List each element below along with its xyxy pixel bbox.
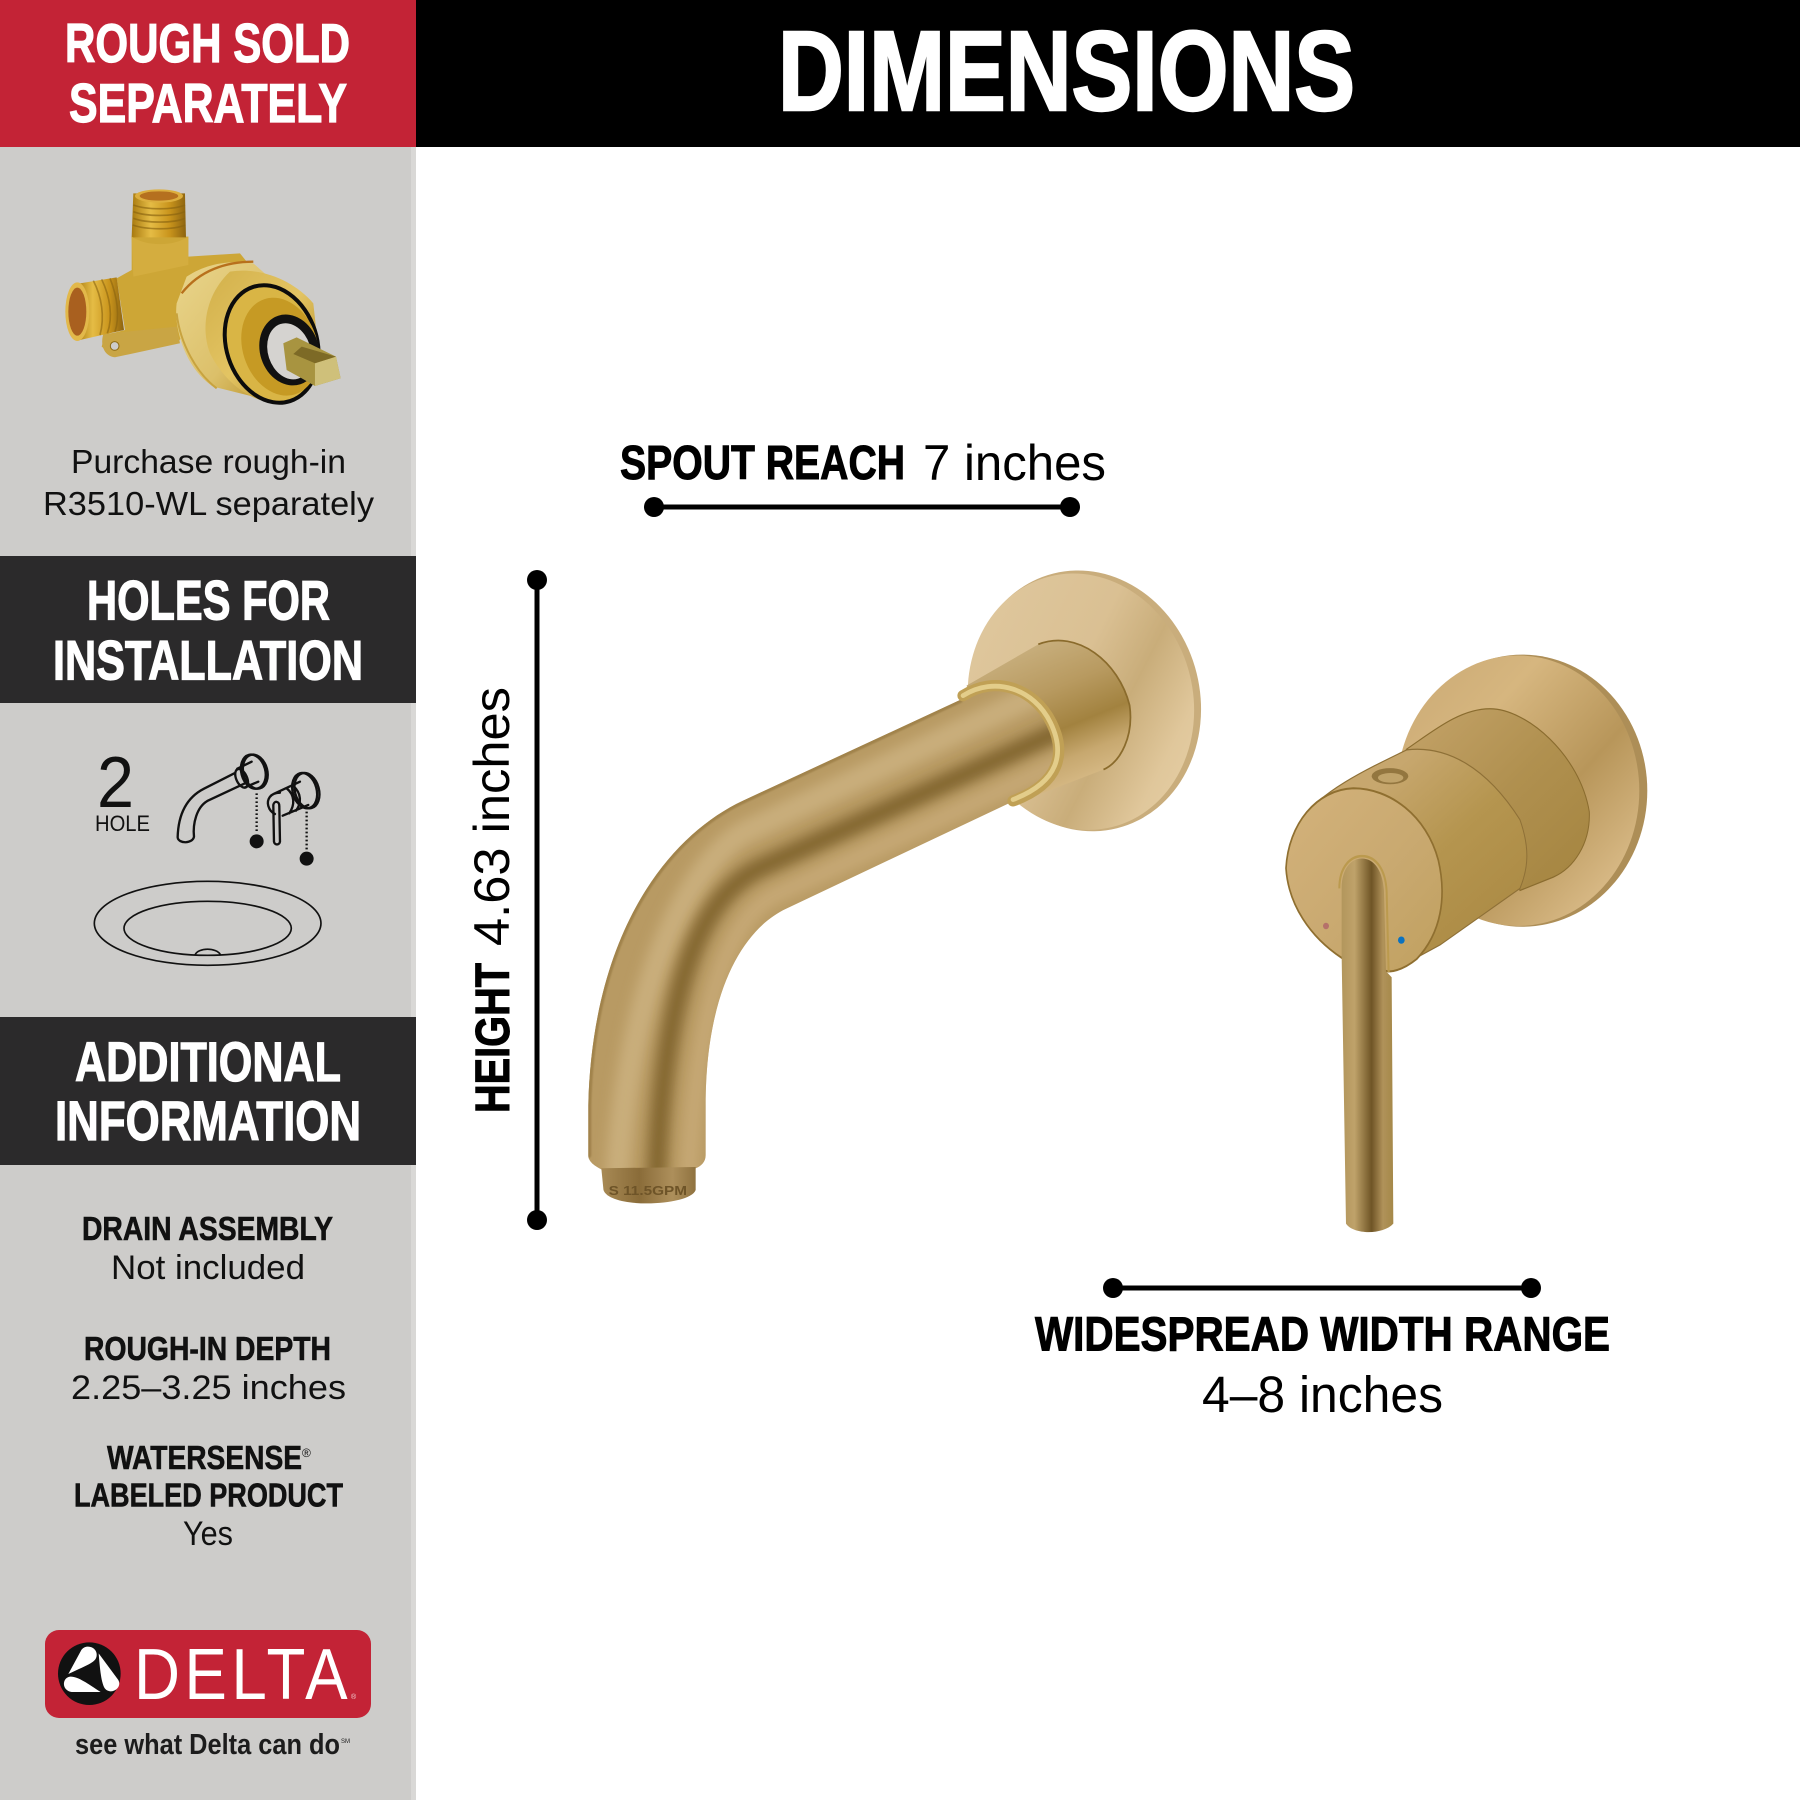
handle rear collar [1407, 709, 1589, 890]
logo: delta [45, 1630, 371, 1718]
logo tagline: see what Delta can do [75, 1729, 340, 1761]
title: DIMENSIONS [778, 8, 1355, 134]
icon: sink basin [94, 881, 321, 965]
heading: additional information: ADDITIONAL [75, 1030, 341, 1093]
spec: rough-in depth: ROUGH-IN DEPTH [84, 1330, 331, 1367]
spout tip: S 11.5GPM [609, 1183, 687, 1198]
icon: delta triangle mark [58, 1642, 121, 1705]
handle body [1302, 749, 1527, 971]
handle front disc [1286, 788, 1442, 972]
heading: holes for installation: INSTALLATION [53, 628, 363, 692]
spec: drain assembly: DRAIN ASSEMBLY [82, 1210, 333, 1247]
spec: rough-in depth: 2.25–3.25 inches [71, 1369, 346, 1407]
photo: lever handle [1286, 655, 1647, 1232]
dimension: widespread width range: 4–8 inches [1202, 1366, 1443, 1423]
logo: delta: ® [351, 1693, 357, 1701]
spec: drain assembly: Not included [111, 1249, 305, 1287]
handle wall plate [1397, 655, 1647, 927]
text: 2 hole [95, 743, 150, 836]
logo tagline: SM [341, 1739, 350, 1745]
heading: additional information [0, 1017, 416, 1165]
spec: watersense labeled product: LABELED PRODUCT [74, 1476, 343, 1514]
icon: spout and handle with hole markers [178, 752, 323, 866]
spec: rough-in depth [71, 1330, 346, 1407]
sidebar panel [0, 0, 416, 1800]
spec: watersense labeled product: ® [302, 1446, 311, 1460]
spout tip [601, 1167, 696, 1203]
photo: rough-in valve [65, 189, 341, 417]
text: purchase rough-in note: Purchase rough-in [71, 443, 346, 480]
heading: additional information: INFORMATION [55, 1089, 361, 1152]
spout pipe [588, 687, 1073, 1179]
heading: holes for installation [0, 556, 416, 703]
text: purchase rough-in note: R3510-WL separately [43, 485, 375, 522]
spec: watersense labeled product: Yes [183, 1515, 233, 1553]
spout ring [963, 686, 1059, 801]
spout collar [967, 641, 1130, 803]
banner: rough sold separately: SEPARATELY [69, 72, 347, 134]
logo: delta: DELTA [134, 1635, 352, 1715]
dimension: spout reach: 7 inches [923, 435, 1106, 491]
photo: wall-mounted spout [588, 546, 1228, 1203]
lever [1339, 856, 1393, 1232]
cold indicator [1398, 936, 1405, 944]
banner: rough sold separately: ROUGH SOLD [65, 12, 350, 74]
dimension: spout reach [620, 435, 1106, 517]
dimension: height [464, 570, 547, 1230]
text: purchase rough-in note [43, 443, 375, 522]
spout wall plate [941, 546, 1228, 856]
dimension: spout reach: SPOUT REACH [620, 437, 905, 490]
heading: holes for installation: HOLES FOR [87, 568, 330, 632]
hot indicator [1323, 923, 1329, 929]
spec: drain assembly [82, 1210, 333, 1287]
dimension: height: 4.63 inches [464, 687, 520, 946]
spec: watersense labeled product [74, 1439, 343, 1553]
text: 2 hole: 2 [97, 743, 134, 823]
set screw [1372, 768, 1408, 784]
text: 2 hole: HOLE [95, 811, 150, 836]
spec: watersense labeled product: WATERSENSE [107, 1439, 302, 1476]
dimension: height: HEIGHT [467, 963, 520, 1113]
dimension: widespread width range: WIDESPREAD WIDTH RANGE [1035, 1308, 1610, 1362]
title bar [416, 0, 1800, 147]
dimension: widespread width range [1035, 1278, 1610, 1423]
banner: rough sold separately [0, 0, 416, 147]
